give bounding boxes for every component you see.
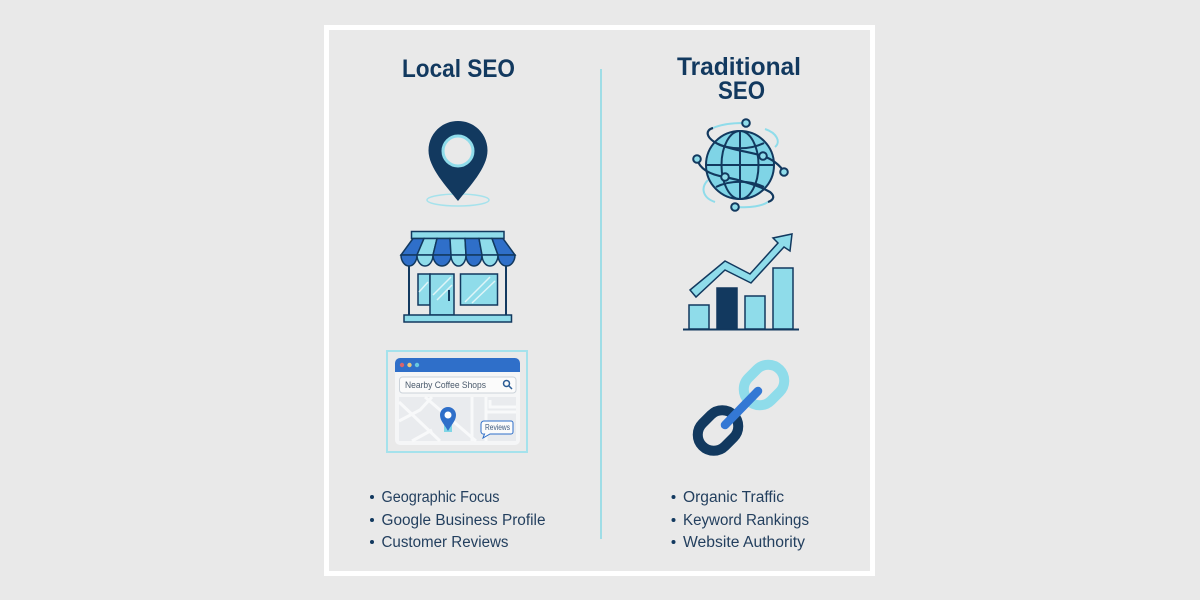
heading: Traditional SEO: Traditional bbox=[677, 53, 801, 81]
bullet list: traditional SEO: Website Authority bbox=[683, 534, 805, 551]
bullet list: traditional SEO: Organic Traffic bbox=[683, 489, 784, 506]
bullet list: traditional SEO bbox=[672, 489, 809, 551]
bullet list: local SEO: Geographic Focus bbox=[382, 489, 500, 506]
icon: map pin bbox=[427, 121, 489, 206]
white frame bbox=[326, 28, 872, 574]
bullet list: local SEO: Customer Reviews bbox=[382, 534, 509, 551]
heading: Traditional SEO: SEO bbox=[718, 77, 765, 105]
icon: rising bar chart bbox=[683, 234, 799, 330]
icon: local search browser: Nearby Coffee Shops bbox=[405, 380, 486, 390]
bullet list: traditional SEO: Keyword Rankings bbox=[683, 512, 809, 529]
icon: local search browser: Reviews bbox=[485, 423, 510, 432]
heading: Traditional SEO bbox=[677, 53, 801, 105]
icon: storefront bbox=[401, 232, 515, 322]
icon: local search browser bbox=[387, 351, 527, 452]
bullet list: local SEO bbox=[370, 489, 546, 551]
icon: chain link bbox=[691, 358, 791, 457]
panel: local SEO bbox=[370, 55, 546, 551]
bullet list: local SEO: Google Business Profile bbox=[382, 512, 546, 529]
heading: Local SEO: Local SEO bbox=[402, 55, 515, 83]
panel: traditional SEO bbox=[672, 53, 809, 551]
icon: globe with orbits bbox=[693, 119, 788, 211]
center divider bbox=[600, 69, 602, 539]
